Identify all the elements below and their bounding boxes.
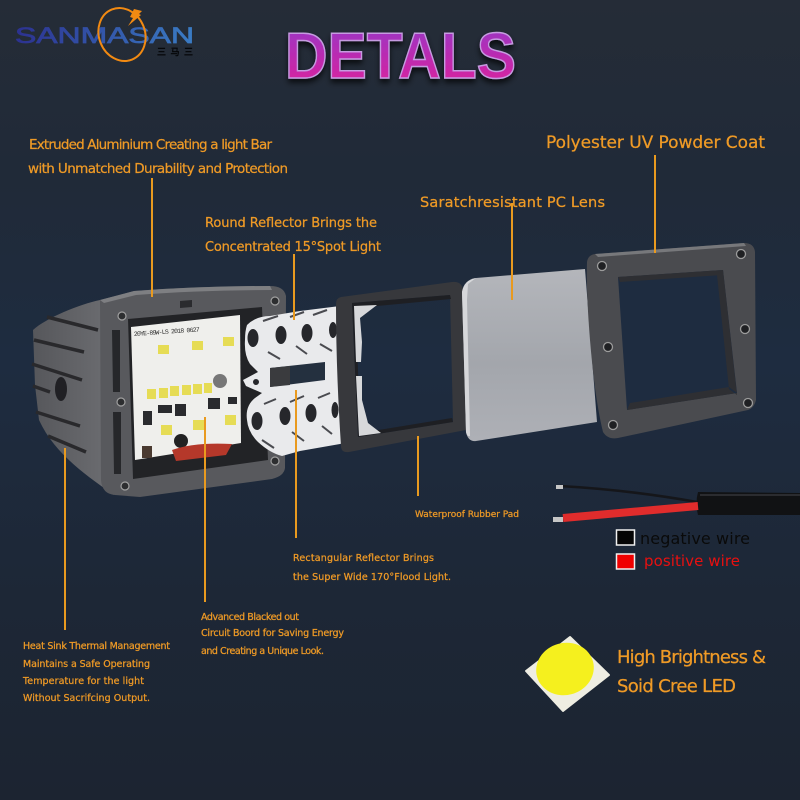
label: circuit board: Circuit Boord for Saving Energy	[201, 628, 344, 639]
label: round reflector: Concentrated 15°Spot Light	[205, 240, 381, 255]
wire legend	[616, 529, 750, 570]
label: round reflector: Round Reflector Brings the	[205, 216, 377, 231]
circuit board	[131, 315, 241, 461]
label: heat sink: Temperature for the light	[22, 676, 144, 687]
label: heat sink: Maintains a Safe Operating	[23, 659, 150, 670]
label: rectangular reflector	[293, 553, 451, 583]
label: extruded aluminium: Extruded Aluminium Creating a light Bar	[29, 137, 272, 153]
label: high brightness: Soid Cree LED	[617, 676, 736, 697]
title: DETALS	[285, 19, 516, 92]
label: rectangular reflector: Rectangular Reflector Brings	[293, 553, 434, 564]
logo ring	[91, 1, 153, 68]
light assembly: housing	[32, 286, 286, 497]
label: heat sink	[22, 641, 170, 704]
logo: SANMASAN	[15, 23, 194, 48]
label: heat sink: Without Sacrifcing Output.	[23, 693, 150, 704]
wire cable	[553, 485, 800, 522]
waterproof rubber pad	[336, 282, 466, 452]
PC lens	[462, 269, 597, 441]
label: high brightness: High Brightness &	[617, 647, 766, 668]
logo sub mark: 三马三	[157, 45, 193, 58]
label: extruded aluminium	[28, 137, 288, 177]
frame screws	[598, 250, 752, 430]
leader lines	[65, 155, 655, 630]
housing side	[33, 300, 114, 495]
negative label: negative wire	[640, 529, 750, 548]
circuit board: 20YE-89W-LS 2018 0627	[134, 326, 200, 338]
label: heat sink: Heat Sink Thermal Management	[23, 641, 170, 652]
label: high brightness	[617, 647, 766, 697]
polyester UV powder coat frame	[587, 243, 756, 438]
positive label: positive wire	[644, 552, 740, 570]
negative swatch	[616, 530, 634, 545]
logo bolt	[128, 9, 142, 26]
icon: LED chip	[526, 636, 609, 711]
housing screws	[117, 297, 279, 490]
label: rubber pad: Waterproof Rubber Pad	[415, 510, 519, 520]
label: extruded aluminium: with Unmatched Durability and Protection	[28, 161, 288, 177]
label: PC lens: Saratchresistant PC Lens	[420, 195, 605, 211]
rectangular and round reflector	[243, 306, 355, 456]
label: circuit board: Advanced Blacked out	[201, 612, 299, 623]
logo	[15, 1, 194, 68]
housing front	[100, 286, 286, 497]
label: rectangular reflector: the Super Wide 170°Flood Light.	[293, 572, 451, 583]
label: powder coat: Polyester UV Powder Coat	[546, 133, 765, 153]
label: circuit board: and Creating a Unique Look.	[201, 646, 324, 657]
positive swatch	[616, 554, 634, 569]
label: round reflector	[205, 216, 381, 255]
label: circuit board	[201, 612, 344, 657]
